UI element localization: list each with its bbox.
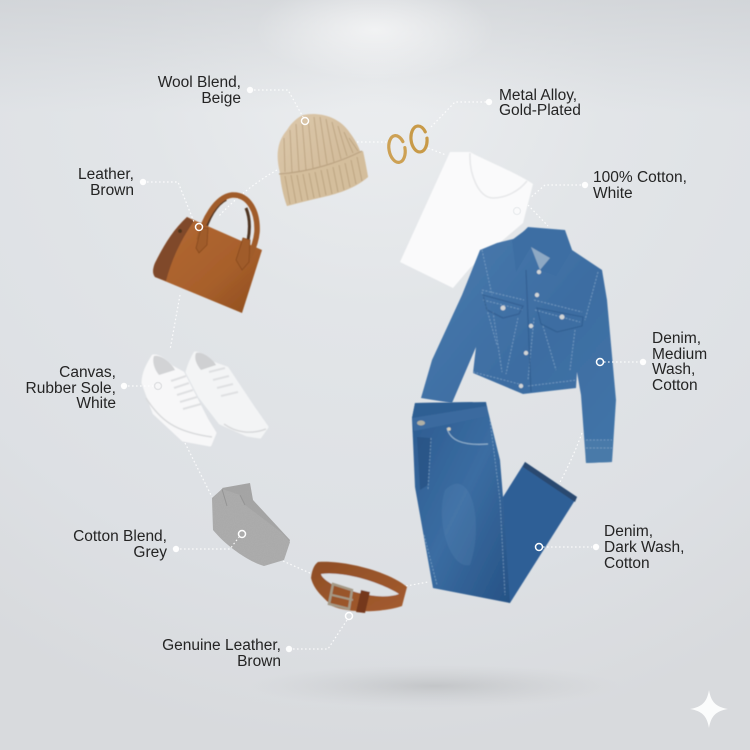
- callout: Denim Dark Wash: Cotton: [604, 555, 650, 572]
- icon: leather handbag: [153, 195, 262, 313]
- callout: 100% Cotton: White: [593, 185, 633, 202]
- callout: 100% Cotton: 100% Cotton,: [593, 169, 687, 186]
- callout: Metal Alloy: Metal Alloy,: [499, 87, 577, 104]
- connector ring path: [170, 142, 582, 586]
- callout: Denim Dark Wash: [536, 523, 684, 572]
- icon: white t-shirt: [400, 152, 533, 288]
- callout: Denim Medium Wash: Denim,: [652, 330, 701, 347]
- callout: Wool Blend: Wool Blend,: [158, 74, 241, 91]
- callout: Denim Dark Wash: Dark Wash,: [604, 539, 684, 556]
- callout: Cotton Blend: Cotton Blend,: [73, 528, 167, 545]
- callout: Leather: Leather,: [78, 166, 134, 183]
- icon: dark wash folded jeans: [412, 402, 577, 603]
- callout: Cotton Blend: [73, 528, 246, 561]
- callout: Denim Medium Wash: Wash,: [652, 361, 695, 378]
- callout: Cotton Blend: Grey: [133, 544, 167, 561]
- callout: Leather: [78, 166, 202, 230]
- callout: Wool Blend: [158, 74, 308, 124]
- callout: Metal Alloy: Gold-Plated: [499, 102, 581, 119]
- icon: beanie: [278, 114, 368, 206]
- icon: grey ankle socks: [212, 483, 290, 566]
- callout: Genuine Leather: [162, 612, 352, 670]
- callout: Canvas: Rubber Sole,: [26, 380, 116, 397]
- callout: Canvas: [26, 364, 162, 412]
- callout: Metal Alloy: [430, 87, 581, 128]
- callout: Denim Medium Wash: Cotton: [652, 377, 698, 394]
- callout: Denim Dark Wash: Denim,: [604, 523, 653, 540]
- callout: Wool Blend: Beige: [201, 90, 241, 107]
- callout: Genuine Leather: Brown: [237, 653, 281, 670]
- icon: medium wash denim jacket: [421, 227, 616, 463]
- callout: Denim Medium Wash: Medium: [652, 346, 707, 363]
- floor shadow: [250, 664, 620, 708]
- callout: Canvas: Canvas,: [59, 364, 116, 381]
- icon: gold hoop earrings: [387, 125, 428, 164]
- icon: white sneakers: [143, 353, 267, 445]
- callout: Genuine Leather: Genuine Leather,: [162, 637, 281, 654]
- callout: Denim Medium Wash: [596, 330, 707, 394]
- callout: Leather: Brown: [90, 182, 134, 199]
- icon: leather belt: [311, 562, 407, 613]
- icon: sparkle: [690, 690, 728, 728]
- callout: 100% Cotton: [514, 169, 687, 214]
- callout: Canvas: White: [76, 395, 116, 412]
